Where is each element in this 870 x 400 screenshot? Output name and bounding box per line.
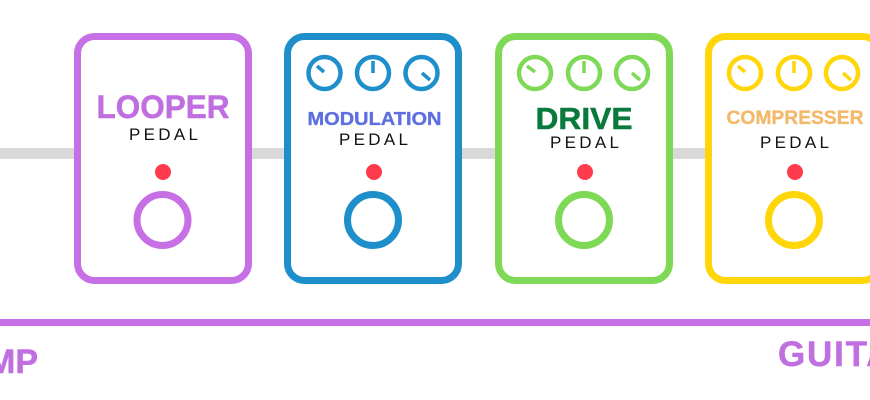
footswitch (768, 194, 820, 246)
indicator light (155, 164, 171, 180)
panel: drive pedal (498, 36, 670, 280)
indicator light (577, 164, 593, 180)
heading: looper: LOOPER (96, 89, 230, 125)
footswitch (558, 194, 610, 246)
knobs (308, 57, 438, 89)
cable: purple return line (0, 319, 870, 326)
label: pedal: PEDAL (129, 125, 198, 144)
knobs (519, 57, 648, 89)
panel: looper pedal (78, 36, 248, 280)
heading: drive: DRIVE (536, 101, 632, 136)
indicator light (366, 164, 382, 180)
footswitch (348, 194, 398, 246)
heading: compresser: COMPRESSER (726, 108, 864, 129)
indicator light (787, 164, 803, 180)
footswitch (137, 194, 188, 246)
panel: modulation pedal (288, 36, 458, 280)
label: pedal: PEDAL (760, 133, 829, 152)
heading: modulation: MODULATION (308, 109, 442, 129)
panel: compresser pedal (708, 36, 870, 280)
label: pedal: PEDAL (550, 133, 619, 152)
cable: grey signal cable between pedals (0, 148, 870, 159)
label: pedal: PEDAL (339, 130, 408, 149)
knobs (729, 57, 858, 89)
